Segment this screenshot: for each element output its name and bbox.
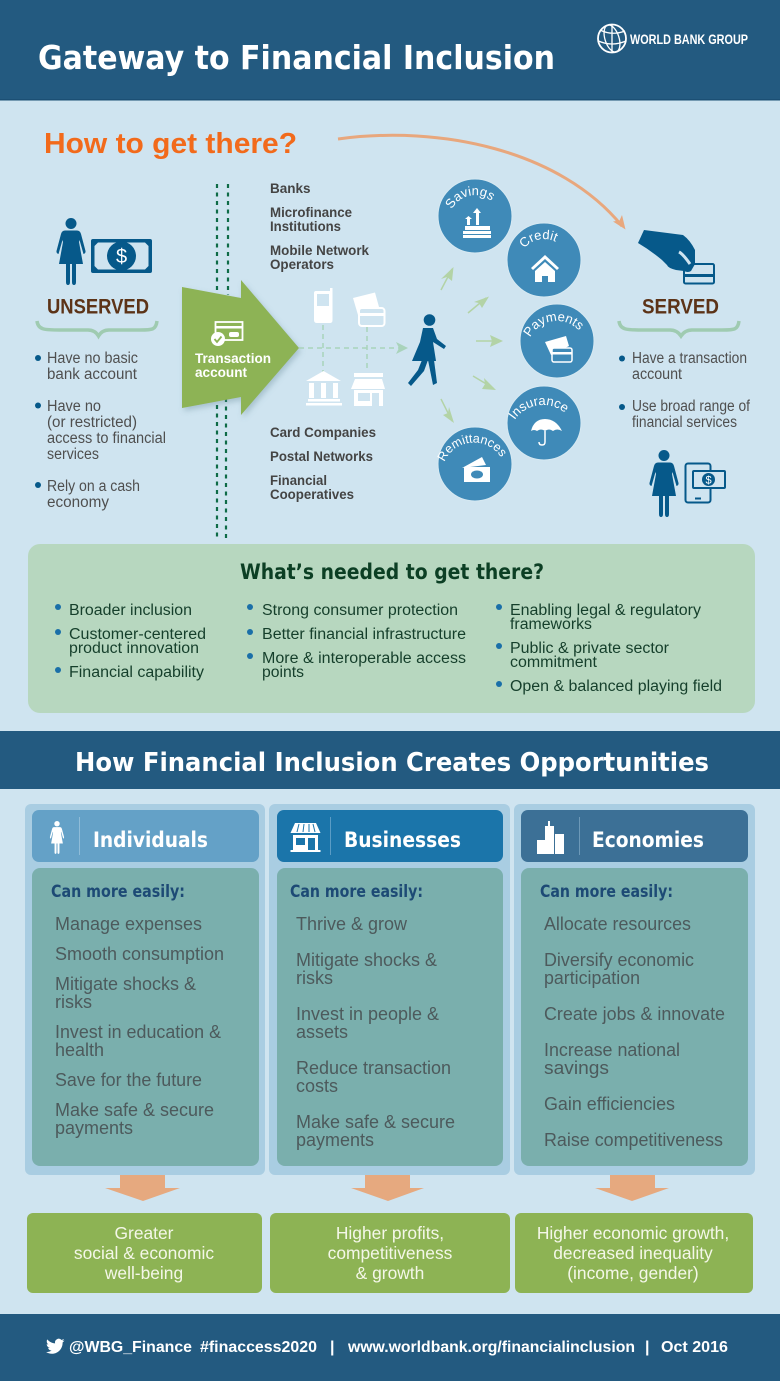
needs column 2: Strong consumer protection [262, 602, 458, 619]
needs column 2: points [262, 664, 304, 681]
curved arrow to served [338, 135, 626, 230]
arrowheads [441, 267, 503, 423]
provider list top: Microfinance [270, 205, 352, 220]
list: businesses: Can more easily: [290, 882, 423, 902]
icon: woman [649, 450, 679, 517]
band heading: opportunities [0, 731, 780, 789]
provider list top: Banks [270, 181, 311, 196]
list: individuals: Smooth consumption [55, 944, 224, 964]
icon: card with check [211, 322, 243, 346]
list: businesses: assets [296, 1022, 348, 1042]
list: businesses: Mitigate shocks & [296, 950, 437, 970]
provider list bottom [270, 425, 376, 502]
outcome: businesses: & growth [356, 1263, 424, 1283]
list: economies: participation [544, 968, 640, 988]
needs column 3: Enabling legal & regulatory [510, 602, 701, 619]
provider list bottom: Postal Networks [270, 449, 373, 464]
provider list top: Operators [270, 257, 334, 272]
provider list top: Institutions [270, 219, 341, 234]
needs column 1: Broader inclusion [69, 602, 192, 619]
icon: banknote: $ [116, 246, 127, 268]
outcome: individuals: social & economic [74, 1243, 214, 1263]
bullet list: access to financial [47, 430, 166, 447]
bullet list: Rely on a cash [47, 478, 140, 495]
bullet list: account [632, 366, 683, 383]
panel: unserved [35, 218, 166, 511]
service: savings [438, 180, 512, 252]
bullet list: financial services [632, 414, 737, 431]
band heading: opportunities: How Financial Inclusion Creates Opportunities [75, 748, 709, 778]
list: economies [521, 868, 748, 1166]
list: economies: Allocate resources [544, 914, 691, 934]
needs column 2: Better financial infrastructure [262, 626, 466, 643]
needs column 1 [55, 602, 206, 681]
outcome: economies: decreased inequality [553, 1243, 713, 1263]
list: individuals: Manage expenses [55, 914, 202, 934]
list: individuals [32, 868, 259, 1166]
needs column 2: More & interoperable access [262, 650, 466, 667]
service: payments: Payments [523, 314, 583, 336]
header: businesses: Businesses [344, 828, 461, 852]
panel: served [619, 230, 751, 517]
list: economies: Gain efficiencies [544, 1094, 675, 1114]
list: businesses: costs [296, 1076, 338, 1096]
brace [619, 321, 739, 336]
bullet list [619, 350, 751, 431]
footer text: | [645, 1339, 649, 1356]
list: economies: savings [544, 1058, 609, 1078]
bullet list: Use broad range of [632, 398, 751, 415]
icon: phone with money [686, 464, 725, 502]
list: businesses: payments [296, 1130, 374, 1150]
heading: UNSERVED: UNSERVED [47, 296, 149, 318]
bullet list: services [47, 446, 99, 463]
brace [37, 321, 157, 336]
provider connection lines [299, 325, 405, 372]
footer text: www.worldbank.org/financialinclusion [347, 1339, 635, 1356]
panel: what's needed [28, 544, 755, 713]
green arrow: transaction account [182, 280, 299, 415]
icon: hand with card [638, 230, 714, 284]
bullet list: Have no [47, 398, 101, 415]
footer text: | [330, 1339, 334, 1356]
bullet list: (or restricted) [47, 414, 137, 431]
icon: phone with money: $ [705, 474, 712, 486]
list: businesses: risks [296, 968, 333, 988]
list: economies: Create jobs & innovate [544, 1004, 725, 1024]
header: individuals: Individuals [93, 828, 208, 852]
heading: SERVED: SERVED [642, 296, 719, 318]
panel: economies [514, 804, 755, 1175]
service: insurance: Insurance [508, 398, 568, 420]
green arrows to services [441, 269, 500, 421]
needs column 1: Customer-centered [69, 626, 206, 643]
list: economies: Raise competitiveness [544, 1130, 723, 1150]
bullet list: bank account [47, 366, 138, 383]
arrowhead to walking woman [396, 342, 408, 354]
service: payments [520, 304, 594, 378]
footer [0, 1314, 780, 1381]
needs column 3: frameworks [510, 616, 592, 633]
list: individuals: Save for the future [55, 1070, 202, 1090]
provider list top: Mobile Network [270, 243, 369, 258]
list: individuals: Invest in education & [55, 1022, 221, 1042]
list: businesses: Reduce transaction [296, 1058, 451, 1078]
service: remittances [437, 428, 512, 500]
needs column 3: Public & private sector [510, 640, 669, 657]
bullet list: Have no basic [47, 350, 138, 367]
needs column 3 [496, 602, 722, 695]
footer text: @WBG_Finance [69, 1339, 192, 1356]
outcome: businesses: competitiveness [328, 1243, 453, 1263]
outcome: economies: Higher economic growth, [537, 1223, 729, 1243]
list: individuals: Mitigate shocks & [55, 974, 196, 994]
list: businesses: Invest in people & [296, 1004, 439, 1024]
panel: individuals [25, 804, 265, 1175]
outcome: individuals: Greater [115, 1223, 174, 1243]
list: economies: Can more easily: [540, 882, 673, 902]
footer text: #finaccess2020 [200, 1339, 317, 1356]
list: economies: Increase national [544, 1040, 680, 1060]
service: credit [508, 224, 580, 296]
logo: World Bank Group: WORLD BANK GROUP [630, 32, 748, 47]
needs column 2 [247, 602, 466, 681]
arrow: individuals outcome [105, 1175, 180, 1201]
outcome: businesses: Higher profits, [336, 1223, 444, 1243]
footer text [69, 1339, 728, 1356]
header: individuals [32, 810, 259, 862]
icon: woman [56, 218, 86, 285]
icon: store [351, 373, 385, 406]
list: individuals: risks [55, 992, 92, 1012]
outcome: economies: (income, gender) [567, 1263, 699, 1283]
service: insurance [508, 386, 580, 460]
icon: walking woman [408, 314, 446, 386]
footer text: Oct 2016 [661, 1339, 728, 1356]
arrow: economies outcome [595, 1175, 669, 1201]
list: individuals: Make safe & secure [55, 1100, 214, 1120]
service: credit: Credit [520, 230, 558, 246]
header band [0, 0, 780, 100]
bullet list [35, 350, 166, 511]
service: savings: Savings [446, 186, 494, 208]
icon: cards [353, 292, 384, 326]
bullet list: Have a transaction [632, 350, 747, 367]
icon: phone [314, 288, 332, 323]
dotted divider [217, 184, 228, 538]
heading: What’s needed to get there? [240, 560, 544, 584]
list: businesses [277, 868, 503, 1166]
arrow: businesses outcome [351, 1175, 424, 1201]
provider list bottom: Financial [270, 473, 327, 488]
outcome: individuals: well-being [104, 1263, 183, 1283]
outcome: individuals [27, 1213, 262, 1293]
outcome: economies [515, 1213, 753, 1293]
bullet list: economy [47, 494, 109, 511]
header: economies: Economies [592, 828, 704, 852]
panel: businesses [269, 804, 510, 1175]
needs column 1: product innovation [69, 640, 199, 657]
provider list bottom: Cooperatives [270, 487, 354, 502]
icon: banknote [91, 239, 152, 273]
needs column 1: Financial capability [69, 664, 204, 681]
list: businesses: Make safe & secure [296, 1112, 455, 1132]
icon: twitter bird [46, 1339, 64, 1354]
list: businesses: Thrive & grow [296, 914, 408, 934]
list: individuals: health [55, 1040, 104, 1060]
provider list bottom: Card Companies [270, 425, 376, 440]
header: economies [521, 810, 748, 862]
provider list top [270, 181, 369, 272]
service: remittances: Remittances [437, 434, 506, 462]
icon: bank building [306, 371, 342, 406]
list: economies: Diversify economic [544, 950, 694, 970]
needs column 3: commitment [510, 654, 598, 671]
header: businesses [277, 810, 503, 862]
outcome: businesses [270, 1213, 510, 1293]
list: individuals: payments [55, 1118, 133, 1138]
needs column 3: Open & balanced playing field [510, 678, 722, 695]
title: Gateway to Financial Inclusion [38, 38, 555, 77]
green arrow: transaction account: account [195, 365, 247, 380]
logo: World Bank Group [598, 23, 748, 54]
heading: How to get there?: How to get there? [44, 128, 297, 160]
green arrow: transaction account: Transaction [195, 351, 271, 366]
list: individuals: Can more easily: [51, 882, 185, 902]
